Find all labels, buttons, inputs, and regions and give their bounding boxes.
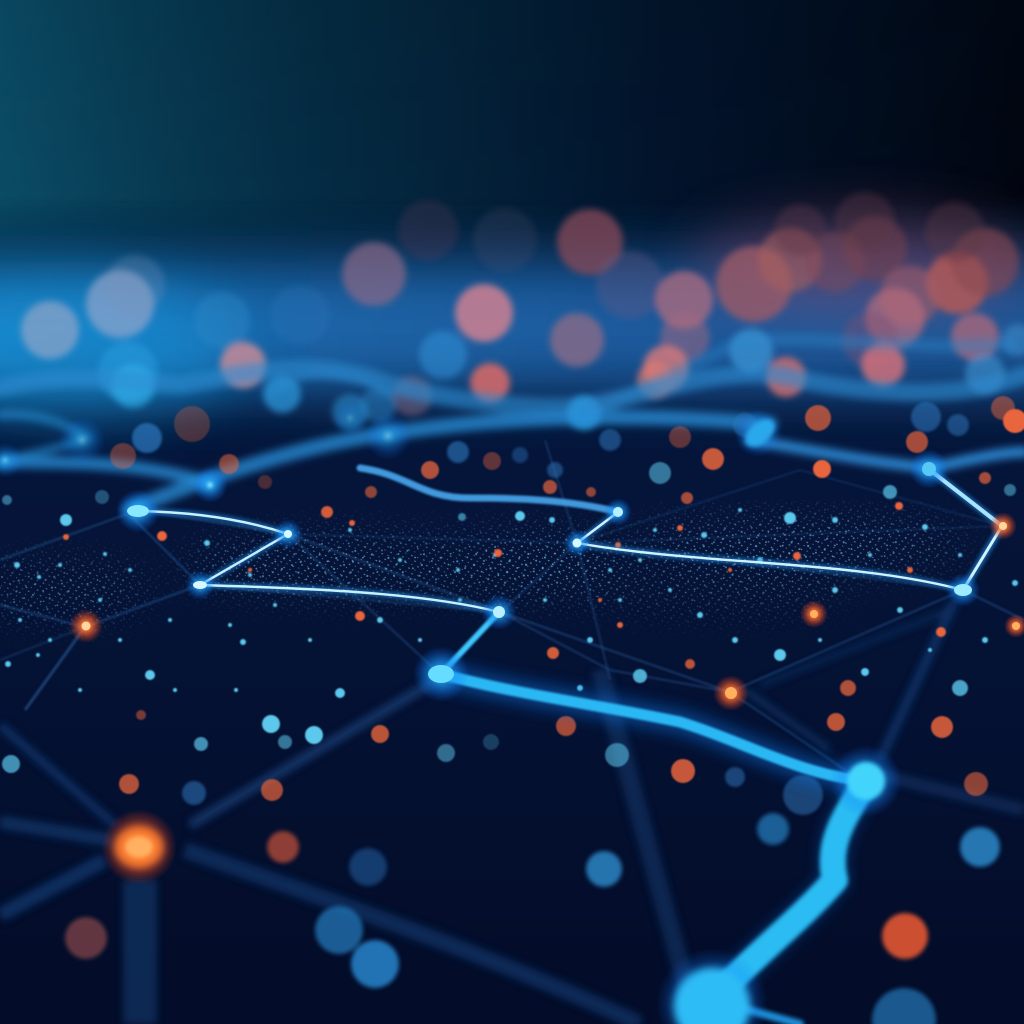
particle field: dense fine dust (0, 500, 984, 642)
small particles (2, 396, 1024, 815)
dark network lines: background mesh (0, 440, 1024, 780)
bright network link: thick foreground cable (441, 612, 866, 1024)
bright network link: middle upper ribbon (360, 468, 963, 590)
bright network link: upper-left chain (138, 511, 499, 612)
glowing nodes: orange (69, 512, 1024, 885)
blue haze band (0, 215, 1024, 420)
bright network link: right side (930, 470, 1002, 590)
bokeh lights: upper blur (21, 192, 1024, 430)
blurred thick background ribbons (0, 339, 1024, 510)
blurred foreground bokeh (65, 813, 1000, 1024)
glowing nodes: blue (0, 400, 980, 1024)
dark network lines: foreground mesh (0, 600, 1024, 1024)
